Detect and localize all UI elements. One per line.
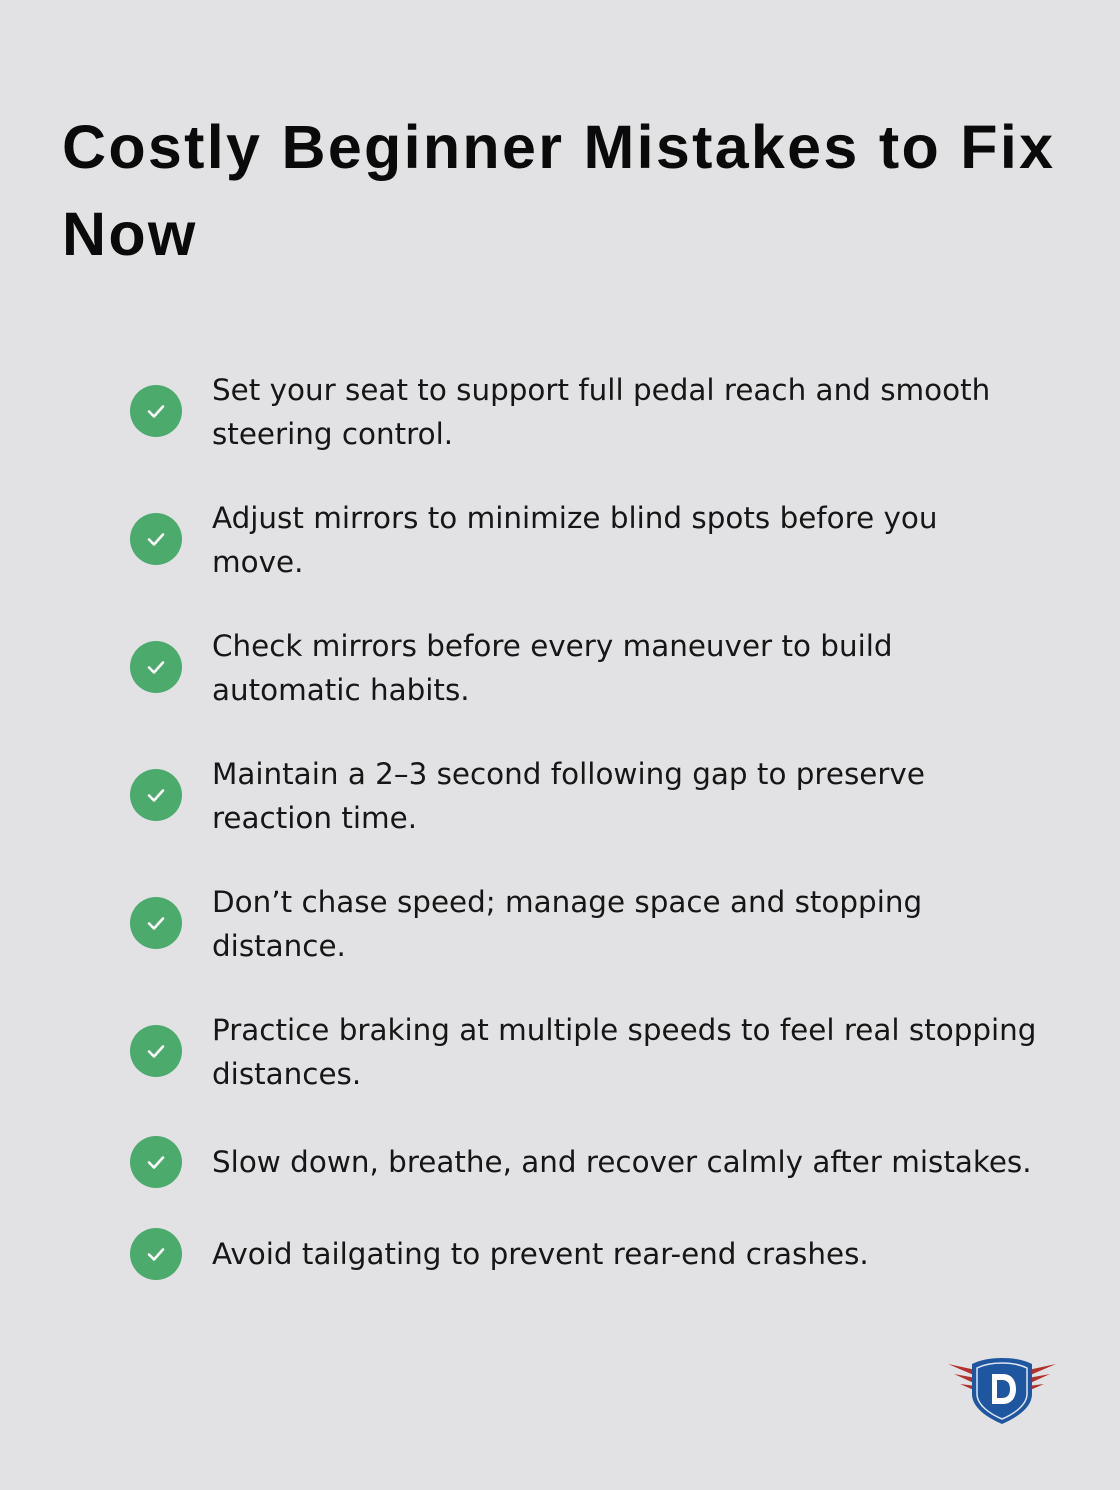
text: Check mirrors before every maneuver to build: [212, 629, 893, 663]
icon: check: [130, 1136, 182, 1188]
title: [62, 113, 1055, 268]
text: [212, 501, 938, 579]
text: Don’t chase speed; manage space and stopping: [212, 885, 922, 919]
item 1: [130, 373, 990, 451]
text: automatic habits.: [212, 673, 470, 707]
text: [212, 885, 922, 963]
icon: check: [130, 641, 182, 693]
logo: [948, 1358, 1056, 1424]
icon: check: [130, 1228, 182, 1280]
item 5: [130, 885, 922, 963]
item 7: [130, 1136, 1032, 1188]
text: steering control.: [212, 417, 453, 451]
item 2: [130, 501, 938, 579]
icon: check: [130, 385, 182, 437]
icon: check: [130, 1025, 182, 1077]
text: [212, 1013, 1036, 1091]
text: Maintain a 2–3 second following gap to preserve: [212, 757, 925, 791]
title: Costly Beginner Mistakes to Fix: [62, 113, 1055, 181]
text: reaction time.: [212, 801, 417, 835]
icon: check: [130, 513, 182, 565]
text: [212, 373, 990, 451]
text: distances.: [212, 1057, 361, 1091]
item 4: [130, 757, 925, 835]
icon: check: [130, 897, 182, 949]
text: [212, 629, 893, 707]
text: Set your seat to support full pedal reach and smooth: [212, 373, 990, 407]
text: Slow down, breathe, and recover calmly after mistakes.: [212, 1145, 1032, 1179]
item 3: [130, 629, 893, 707]
text: Practice braking at multiple speeds to feel real stopping: [212, 1013, 1036, 1047]
title: Now: [62, 200, 198, 268]
text: Adjust mirrors to minimize blind spots before you: [212, 501, 938, 535]
item 8: [130, 1228, 869, 1280]
item 6: [130, 1013, 1036, 1091]
text: move.: [212, 545, 303, 579]
icon: check: [130, 769, 182, 821]
text: Avoid tailgating to prevent rear-end crashes.: [212, 1237, 869, 1271]
text: [212, 757, 925, 835]
text: distance.: [212, 929, 346, 963]
